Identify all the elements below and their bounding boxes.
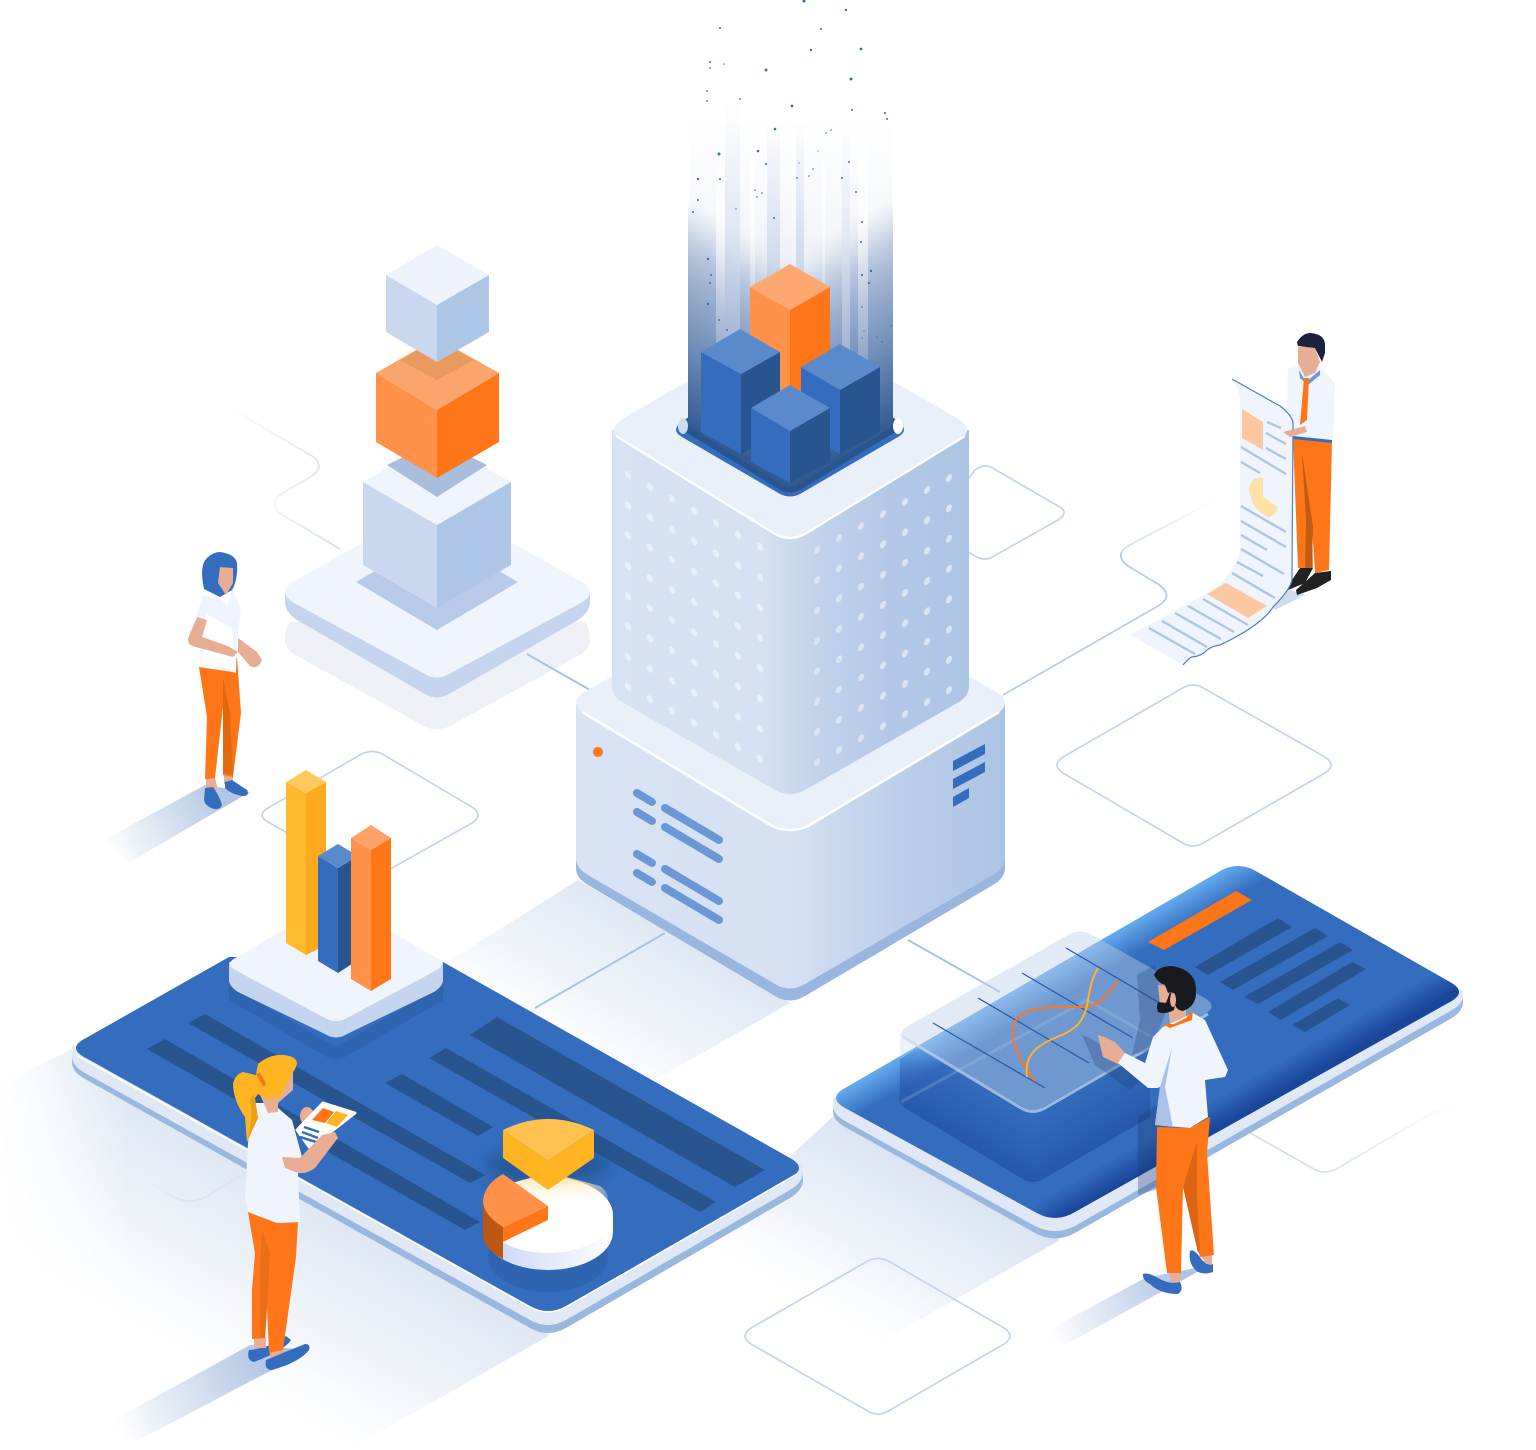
ground shadow: right panel xyxy=(700,1110,1060,1345)
lower box indicator xyxy=(593,747,603,757)
glass wall on white xyxy=(900,1033,920,1059)
tile: upper left fading xyxy=(230,408,340,549)
stripes xyxy=(1195,918,1366,1032)
hair xyxy=(256,1055,297,1099)
scroll text lines xyxy=(1149,422,1286,654)
connector: platform to tower xyxy=(527,654,590,690)
shirt xyxy=(245,1103,302,1223)
shirt xyxy=(1287,365,1335,440)
bar platform shadow xyxy=(229,985,443,1059)
beard xyxy=(1157,992,1176,1013)
panel surface xyxy=(836,866,1459,1218)
back shoe xyxy=(1190,1250,1213,1274)
face xyxy=(218,567,233,595)
arm xyxy=(282,1132,338,1173)
hair tie xyxy=(259,1075,264,1084)
person: woman with blue hair xyxy=(100,552,262,862)
recess xyxy=(676,360,904,496)
panel rim dark xyxy=(833,990,1463,1238)
orange cube xyxy=(376,338,499,410)
shoes xyxy=(1288,568,1313,590)
tablet hand xyxy=(300,1107,314,1125)
legs xyxy=(199,657,241,779)
hair xyxy=(202,552,237,597)
tile: lower left fading xyxy=(70,1140,250,1201)
ear xyxy=(1170,993,1176,1007)
ankle xyxy=(1170,1273,1180,1285)
foot shadow xyxy=(100,785,250,862)
lower box stripes xyxy=(953,744,985,807)
platform reflection xyxy=(285,622,590,730)
collar xyxy=(1299,370,1320,385)
glass back edge xyxy=(901,1000,1150,1102)
tie xyxy=(1300,378,1309,425)
front shoe xyxy=(266,1344,310,1370)
person: woman with yellow ponytail xyxy=(110,1055,355,1442)
lower box top xyxy=(576,575,1005,830)
connector: panel to tower xyxy=(535,933,665,1008)
platform base xyxy=(285,592,590,698)
orange cube xyxy=(750,287,790,420)
ground shadow: tower xyxy=(443,880,790,1100)
ankles xyxy=(206,774,233,790)
trousers xyxy=(1293,438,1332,573)
panel surface xyxy=(76,957,799,1311)
blue cube left xyxy=(701,352,741,454)
blue cube front xyxy=(751,408,790,483)
pie chart xyxy=(483,1119,613,1292)
bar chart block xyxy=(229,770,443,1038)
ponytail xyxy=(233,1072,265,1142)
ground shadow: left panel xyxy=(0,1020,550,1450)
blue bar xyxy=(318,856,338,973)
scroll image blocks xyxy=(1207,409,1267,618)
bar platform xyxy=(229,962,443,1038)
panel stripes xyxy=(147,1014,765,1230)
hair xyxy=(1154,966,1196,1011)
upper box faces xyxy=(612,430,969,794)
document scroll xyxy=(1130,379,1292,665)
front shoe xyxy=(1143,1274,1182,1294)
tile: right of tower xyxy=(960,466,1064,559)
panel rim light xyxy=(833,990,1463,1231)
trousers xyxy=(1156,1117,1214,1274)
foot shadow xyxy=(110,1345,310,1442)
shoes xyxy=(204,787,222,809)
tile: lower right fading xyxy=(1245,1109,1465,1172)
neck and face xyxy=(258,1072,293,1113)
panel rim light xyxy=(72,1046,803,1325)
yellow curve xyxy=(1027,968,1098,1077)
connector: right S-curve xyxy=(1121,500,1215,560)
foot shadow xyxy=(1045,1265,1210,1345)
cube shadow diamond xyxy=(356,535,518,630)
foot shadow xyxy=(1265,590,1305,610)
orange bar xyxy=(351,838,371,991)
back shoe xyxy=(248,1336,291,1362)
tile: behind bar chart xyxy=(262,752,478,872)
left blue data panel xyxy=(72,957,803,1333)
other arm xyxy=(238,638,262,667)
person: man holding document scroll xyxy=(1130,333,1335,665)
lower cube xyxy=(363,440,511,525)
upper box top xyxy=(614,322,967,538)
neck xyxy=(1168,1005,1186,1024)
shirt shade xyxy=(1155,1048,1173,1127)
tablet xyxy=(297,1103,355,1148)
connector: tower to glass xyxy=(908,940,1000,992)
glass plate xyxy=(902,932,1212,1110)
top cube xyxy=(386,245,489,305)
dot grid right xyxy=(810,460,962,775)
left stacked cubes on platform xyxy=(285,245,590,730)
central server tower xyxy=(576,0,1005,1000)
face xyxy=(1158,985,1172,1004)
hand xyxy=(1283,426,1307,437)
connector: tower to right curve xyxy=(1003,552,1166,695)
orange header bar xyxy=(1148,891,1252,950)
right blue tablet panel xyxy=(833,866,1463,1238)
lower box faces xyxy=(576,703,1005,988)
face xyxy=(1298,347,1320,377)
blue cube right xyxy=(801,367,840,454)
glass well right xyxy=(1033,1048,1150,1182)
body shadow xyxy=(1138,1095,1172,1195)
arm xyxy=(188,617,238,657)
person: bearded man pointing at glass xyxy=(1045,965,1228,1345)
belt xyxy=(1293,436,1332,443)
shirt xyxy=(196,590,241,673)
scroll pie xyxy=(1249,478,1278,517)
ankles xyxy=(254,1337,283,1358)
outlined floor tiles and connectors xyxy=(70,408,1465,1414)
panel rim dark xyxy=(72,1048,803,1333)
tile: bottom center xyxy=(745,1258,1010,1414)
lower box dark lip xyxy=(576,703,1005,1000)
collar xyxy=(1162,1010,1193,1028)
orange curve xyxy=(1013,980,1118,1081)
data beam xyxy=(688,100,893,492)
shirt xyxy=(1118,1013,1228,1128)
hand xyxy=(1098,1035,1125,1064)
tile: large right xyxy=(1057,685,1331,846)
glass chart axes xyxy=(933,948,1158,1088)
lower box vents xyxy=(637,793,719,920)
glass well left xyxy=(899,1047,1033,1182)
yellow bar xyxy=(286,782,306,955)
trousers xyxy=(248,1212,298,1353)
hair xyxy=(1297,333,1325,362)
dot grid left xyxy=(620,460,770,775)
particles xyxy=(692,0,892,343)
